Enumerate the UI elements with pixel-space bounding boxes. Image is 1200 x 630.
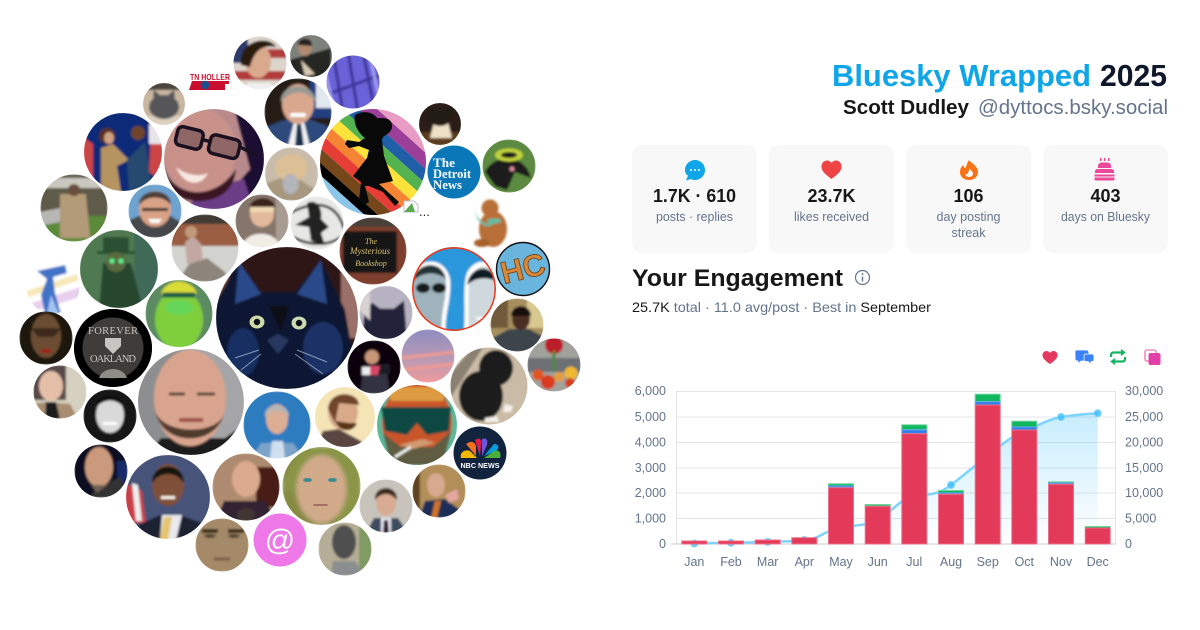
month labels: Aug <box>940 555 962 569</box>
left axis labels: 2,000 <box>635 486 666 500</box>
avatar: The Detroit News: Detroit <box>433 167 472 181</box>
avatar: calico cat <box>418 102 462 146</box>
avatar: man in suit <box>359 479 413 533</box>
avatar: purple wood <box>326 56 380 108</box>
avatar: trench coat <box>40 174 108 242</box>
month labels: Oct <box>1015 555 1035 569</box>
icon: reply legend <box>1075 350 1094 364</box>
month labels: Sep <box>977 555 999 569</box>
month labels: Apr <box>795 555 814 569</box>
left axis labels: 3,000 <box>635 461 666 475</box>
bars: green reposts <box>682 394 1110 542</box>
right axis labels <box>1125 384 1163 551</box>
stat card: days on Bluesky: days on Bluesky <box>1061 210 1151 224</box>
title: Bluesky Wrapped <box>832 58 1091 93</box>
avatar: masked woman <box>19 311 73 365</box>
avatar: older man blue background <box>128 184 182 238</box>
bars: blue replies <box>828 402 1074 494</box>
avatar: sunset clouds <box>401 329 455 383</box>
avatar: Forever Oakland: OAKLAND <box>90 354 136 365</box>
month labels: Jun <box>868 555 888 569</box>
combo chart: monthly engagement bars and cumulative line <box>635 384 1163 569</box>
avatar: The Detroit News <box>428 146 480 198</box>
avatar: dark portrait <box>289 34 333 78</box>
engagement summary: 25.7K total · 11.0 avg/post · Best in September <box>632 299 931 315</box>
right axis labels: 0 <box>1125 537 1132 551</box>
left axis labels: 5,000 <box>635 410 666 424</box>
stat card: posts and replies: posts · replies <box>656 210 733 224</box>
stat card: likes received <box>769 145 894 253</box>
avatar: bald man <box>137 348 245 456</box>
avatar: Schumer <box>412 464 466 518</box>
avatar: cream dog <box>264 147 318 201</box>
stat card: posts and replies <box>632 145 757 253</box>
avatar: rainbow mystery silhouette <box>320 109 426 215</box>
bars: red likes <box>682 405 1110 544</box>
month labels: Feb <box>720 555 742 569</box>
chart legend icons <box>1042 350 1160 365</box>
avatar: Mysterious Bookshop sign <box>339 217 407 285</box>
avatar: bald man two <box>212 453 280 522</box>
avatar: NBC News: NBC NEWS <box>460 461 500 470</box>
avatar: broken image placeholder <box>404 201 430 219</box>
avatar: flower bouquet <box>527 336 581 392</box>
stacked bars <box>682 394 1110 544</box>
user name and handle: @dyttocs.bsky.social <box>978 97 1168 119</box>
avatar: pink at-sign: @ <box>265 524 295 557</box>
avatar: Mysterious Bookshop sign: The <box>365 237 377 246</box>
icon: info <box>856 270 870 284</box>
avatar: Forever Oakland <box>73 308 153 388</box>
right axis labels: 5,000 <box>1125 512 1156 526</box>
avatar: The Detroit News: News <box>433 178 462 192</box>
icon: quote legend <box>1145 350 1160 365</box>
icon: flame <box>960 160 978 180</box>
month labels: Dec <box>1087 555 1109 569</box>
avatar: broken image placeholder: ... <box>419 204 430 219</box>
avatar: Newsom <box>264 78 332 146</box>
avatar: sunglasses poster man <box>376 381 458 466</box>
avatar: man blue studio <box>243 391 311 459</box>
avatar: green bird <box>145 280 213 350</box>
avatar: HC badge: HC <box>497 246 549 291</box>
avatar: glasses selfie <box>163 108 265 210</box>
stat card: days on Bluesky <box>1043 145 1168 253</box>
avatar: Fetterman <box>74 444 128 498</box>
avatar: green plague doctor <box>79 229 159 309</box>
avatar: man with flag <box>234 36 286 90</box>
stat card: day posting streak <box>906 145 1031 253</box>
icon: heart <box>822 160 842 179</box>
icon: birthday cake <box>1094 158 1114 180</box>
right axis labels: 15,000 <box>1125 461 1163 475</box>
avatar: man reading <box>347 340 401 394</box>
icon: like legend <box>1042 351 1058 364</box>
user name and handle: Scott Dudley <box>843 97 970 119</box>
avatar: bearded man side <box>314 386 376 448</box>
stat card: day posting streak: day posting <box>936 210 1001 224</box>
avatar: green hair woman <box>282 446 362 526</box>
avatar: black poodle <box>449 346 529 426</box>
avatar: Kamala handshake <box>83 112 163 192</box>
cumulative points <box>691 410 1101 547</box>
avatar: TN Holler logo: TN HOLLER <box>190 72 230 82</box>
avatar: heraldic lion <box>290 196 344 250</box>
left axis labels <box>635 384 666 551</box>
right axis labels: 30,000 <box>1125 384 1163 398</box>
avatar bubble cluster <box>19 33 581 576</box>
stat card: posts and replies: 1.7K · 610 <box>653 186 736 206</box>
avatar: two men red ring <box>411 246 497 332</box>
avatar: large black cat <box>215 246 359 390</box>
month labels: Jan <box>684 555 704 569</box>
left axis labels: 4,000 <box>635 436 666 450</box>
avatar: black dog with ring <box>482 139 536 193</box>
avatar: TN Holler logo <box>189 72 230 90</box>
avatar: Jeffries <box>125 454 211 540</box>
avatar: Forever Oakland: FOREVER <box>88 326 138 337</box>
month labels: May <box>829 555 854 569</box>
cumulative line <box>694 413 1098 544</box>
stat card: day posting streak: streak <box>952 226 986 240</box>
stat card: day posting streak: 106 <box>954 186 984 206</box>
user name and handle <box>843 97 1168 119</box>
avatar: pink at-sign <box>254 514 306 566</box>
month labels: Jul <box>906 555 922 569</box>
heading: Your Engagement: Your Engagement <box>632 265 843 292</box>
avatar: black and white woman <box>83 389 137 443</box>
cumulative area <box>694 413 1098 544</box>
avatar: close-up eyes man <box>195 518 249 572</box>
icon: repost legend <box>1111 350 1125 364</box>
stat card: days on Bluesky: 403 <box>1090 186 1120 206</box>
right axis labels: 25,000 <box>1125 410 1163 424</box>
avatar: Buddha statue <box>318 522 372 576</box>
avatar: woman on rock <box>171 214 239 282</box>
month labels <box>684 555 1109 569</box>
avatar: The Detroit News: The <box>433 156 455 170</box>
right axis labels: 20,000 <box>1125 436 1163 450</box>
chart grid and axes <box>676 392 1116 544</box>
avatar: brown bear <box>474 200 507 247</box>
avatar: man with glasses outdoors <box>490 298 544 352</box>
title: 2025 <box>1100 58 1167 93</box>
stat card: likes received: likes received <box>794 210 869 224</box>
avatar: small black cat <box>356 286 413 340</box>
avatar: grey cat <box>142 82 186 126</box>
avatar: kid with headband <box>235 194 289 248</box>
icon: chat bubble <box>685 160 705 180</box>
avatar: Mysterious Bookshop sign: Bookshop <box>355 259 387 268</box>
left axis labels: 0 <box>659 537 666 551</box>
right axis labels: 10,000 <box>1125 486 1163 500</box>
avatar: woman selfie <box>33 365 87 419</box>
month labels: Nov <box>1050 555 1073 569</box>
left axis labels: 6,000 <box>635 384 666 398</box>
stat card: likes received: 23.7K <box>808 186 856 206</box>
month labels: Mar <box>757 555 778 569</box>
avatar: NBC News <box>454 426 506 480</box>
left axis labels: 1,000 <box>635 512 666 526</box>
avatar: blue dragon <box>26 260 80 314</box>
avatar: Mysterious Bookshop sign: Mysterious <box>349 246 390 256</box>
